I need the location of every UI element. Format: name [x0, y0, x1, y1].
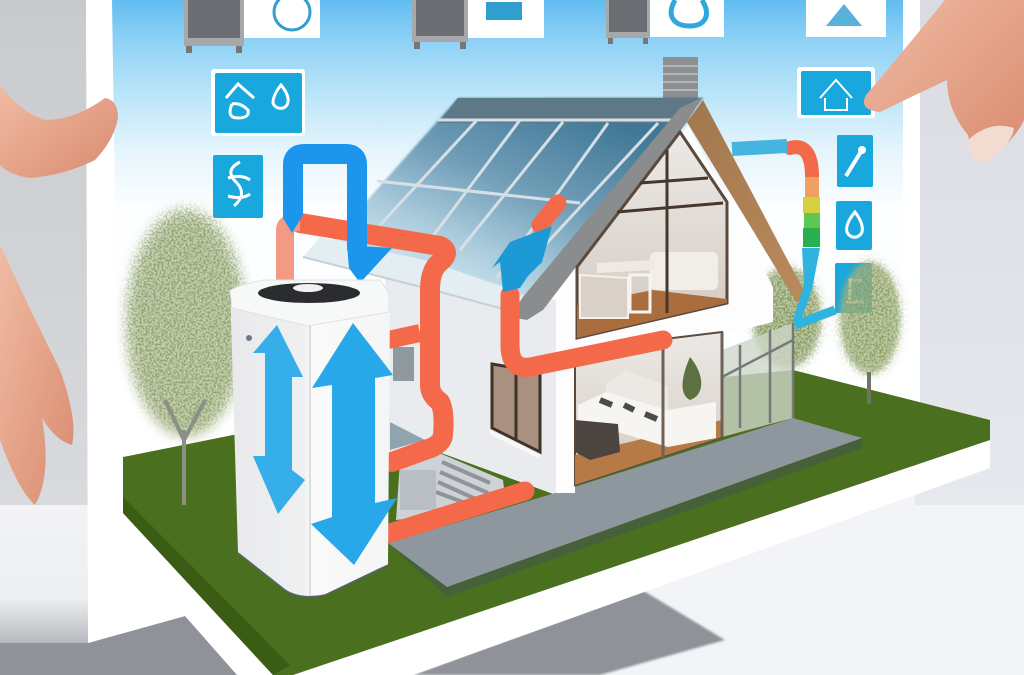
blue arrow: large double [311, 323, 397, 565]
lower room window [575, 332, 722, 485]
icon: tile plant [213, 155, 263, 218]
unit fan [258, 283, 360, 303]
icon: tile tool [837, 135, 873, 187]
unit body [231, 296, 390, 597]
hot pipe: floor run [510, 295, 663, 367]
hot pipes [285, 147, 812, 533]
right tree [840, 262, 900, 404]
patio stones [388, 418, 862, 587]
ground [123, 370, 990, 675]
right colour stack arrow [732, 146, 835, 330]
patio [388, 438, 862, 597]
icon: top unit 2 [412, 0, 544, 49]
equipment radiator [396, 452, 505, 520]
blue arrow: top loop [283, 154, 392, 283]
conservatory [722, 323, 793, 437]
hand: top right [864, 0, 1024, 163]
grey roof edge [510, 97, 703, 320]
hot pipe: main [300, 223, 446, 462]
hot pipe: top right bend [790, 147, 812, 177]
upper room window [577, 132, 727, 338]
icon: top unit 3 [606, 0, 724, 44]
top row icons [184, 0, 886, 53]
icon: tile house top-right [797, 67, 875, 118]
side lower patch [390, 422, 425, 450]
sky panel [112, 0, 903, 400]
icon: tile drop [836, 201, 872, 250]
icon: tile pipe [835, 263, 872, 313]
hot pipe: bottom [390, 491, 525, 533]
hand: top left [0, 85, 118, 178]
blue arrow: roof [492, 226, 552, 292]
icon: tile house flame [211, 69, 305, 136]
sofa [578, 370, 716, 447]
icon: top tree card [806, 0, 886, 37]
white gable wall [556, 125, 773, 493]
hot pipe: pale left [285, 222, 300, 280]
blue arrow: small double [253, 325, 305, 514]
hot pipe: bottom knob [518, 484, 532, 498]
middle right tree [753, 268, 821, 368]
heat pump unit [230, 280, 397, 597]
lower left window [490, 364, 540, 457]
hot pipe: stub [388, 333, 420, 340]
side window [393, 347, 414, 381]
hot pipe: roof riser [540, 203, 558, 225]
wood gable eave [687, 100, 805, 303]
hand: lower left [0, 245, 74, 505]
house [303, 57, 862, 587]
icon: top unit 1 [184, 0, 320, 53]
unit top [230, 280, 389, 326]
chimney [663, 57, 698, 99]
floor shadow [0, 590, 725, 675]
left tree [126, 208, 246, 505]
solar roof [303, 98, 703, 310]
house side wall [385, 270, 556, 495]
